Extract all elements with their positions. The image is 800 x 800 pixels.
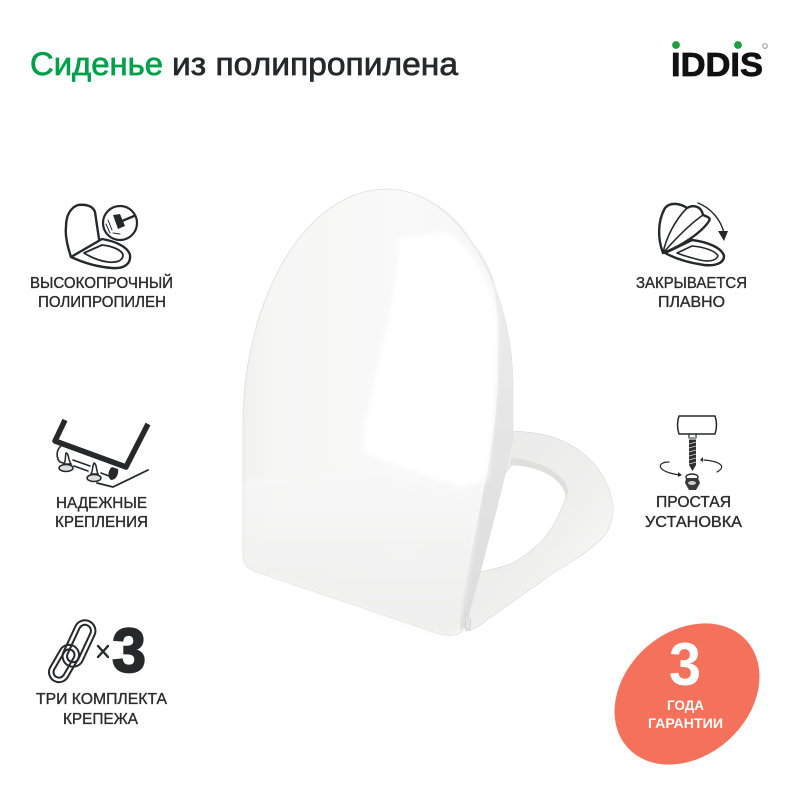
label [30, 274, 173, 311]
label: НАДЕЖНЫЕ [56, 495, 147, 512]
label: ПРОСТАЯ [656, 494, 731, 511]
label: КРЕПЛЕНИЯ [55, 514, 148, 531]
badge text [648, 697, 723, 731]
label: КРЕПЕЖА [63, 711, 139, 728]
feature: soft close [636, 203, 747, 311]
badge number: 3 [669, 631, 701, 698]
label [645, 494, 743, 531]
hinge cylinder [57, 446, 109, 476]
icon: chain links x3: 3 [112, 617, 146, 686]
feature: reliable fasteners [55, 420, 148, 531]
icon: closing lid [659, 203, 728, 265]
lid rim band [433, 202, 513, 630]
lid lower shading [243, 470, 480, 635]
badge text: ГОДА [667, 697, 704, 713]
icon: bolt and nut [660, 416, 722, 490]
label: ВЫСОКОПРОЧНЫЙ [30, 274, 173, 292]
label: ПЛАВНО [658, 294, 725, 311]
badge shape [586, 594, 788, 794]
lid highlight [363, 232, 497, 487]
label [636, 275, 747, 311]
product: toilet seat [243, 189, 613, 635]
label [36, 691, 168, 728]
warranty badge [586, 594, 788, 794]
title: Сиденье [30, 46, 163, 82]
feature: easy install [645, 416, 743, 531]
title [30, 46, 458, 82]
icon: seat with hammer [66, 205, 137, 268]
ring inner wall [510, 458, 568, 500]
label: ЗАКРЫВАЕТСЯ [636, 275, 747, 292]
label [55, 495, 148, 531]
title: из полипропилена [172, 46, 458, 82]
label: ПОЛИПРОПИЛЕН [38, 294, 166, 311]
label: УСТАНОВКА [645, 514, 743, 531]
logo: IDDIS: IDDIS [671, 46, 763, 83]
badge text: ГАРАНТИИ [648, 715, 723, 731]
icon: hinges [55, 420, 148, 487]
label: ТРИ КОМПЛЕКТА [36, 691, 168, 708]
hinge bolts [64, 453, 71, 464]
base line [97, 470, 148, 487]
hinge [465, 613, 471, 631]
feature: three fastening kits [36, 617, 168, 728]
seat lid [243, 189, 513, 635]
seat ring [458, 431, 613, 631]
feature: high-strength polypropylene [30, 205, 173, 311]
